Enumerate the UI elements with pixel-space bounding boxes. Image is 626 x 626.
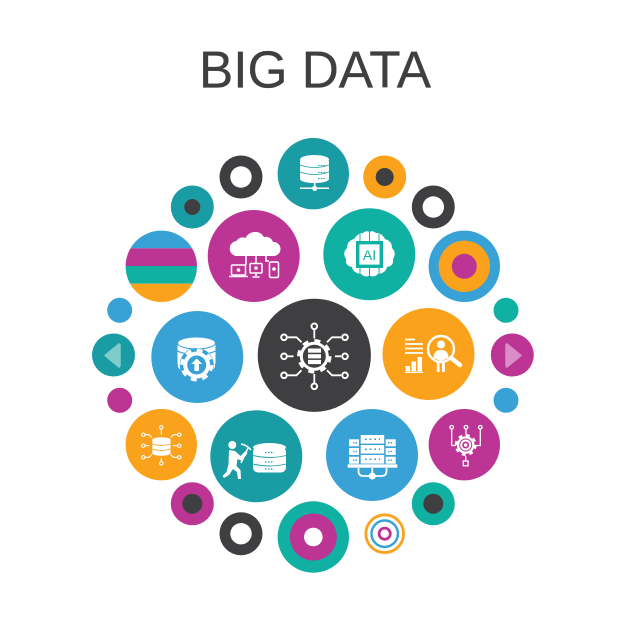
small blue dot right	[494, 388, 518, 413]
decorative dot: teal with dark centre	[171, 186, 214, 228]
panel: data distribution	[126, 409, 197, 480]
icon: database with radial nodes	[142, 426, 181, 465]
icon: gear with three nodes	[450, 426, 482, 466]
title: BIG DATA	[199, 41, 431, 99]
icon: miner with pickaxe and database	[222, 441, 286, 479]
decorative target: bottom teal and magenta	[278, 501, 349, 573]
decorative ring: top right dark	[412, 186, 455, 228]
icon: AI brain chip: AI	[363, 247, 376, 263]
icon: database with gear and upload arrow	[177, 337, 216, 382]
icon: database network	[300, 155, 329, 191]
panel: data analysis	[382, 308, 474, 400]
icon: report, bar chart and magnifier with person	[405, 336, 460, 373]
decorative concentric rings	[364, 513, 406, 555]
panel: top database network	[278, 138, 349, 209]
panel: cloud devices	[208, 210, 300, 302]
icon: cloud with connected devices	[229, 232, 281, 278]
icon: server racks	[348, 435, 397, 480]
panel: data mining	[210, 410, 302, 502]
panel: artificial intelligence	[323, 208, 415, 300]
panel: central big data hub	[258, 299, 371, 412]
panel: process gear	[429, 409, 500, 480]
small blue dot left	[107, 298, 132, 323]
icon: gear with server and connected nodes	[281, 324, 348, 389]
decorative dot: green with dark centre	[412, 482, 455, 525]
right arrow button	[491, 334, 534, 376]
decorative dot: orange with dark centre	[363, 156, 406, 198]
small magenta dot left	[107, 388, 132, 413]
decorative striped circle	[125, 230, 198, 303]
decorative ring: bottom left dark	[220, 512, 262, 555]
panel: data upload settings	[151, 311, 243, 403]
panel: data centre servers	[326, 409, 418, 501]
left arrow button	[92, 334, 135, 376]
decorative dot: magenta with dark centre	[171, 482, 214, 525]
decorative target: blue orange magenta	[429, 231, 500, 302]
decorative ring: top left dark	[220, 156, 262, 198]
small green dot right	[494, 298, 518, 323]
